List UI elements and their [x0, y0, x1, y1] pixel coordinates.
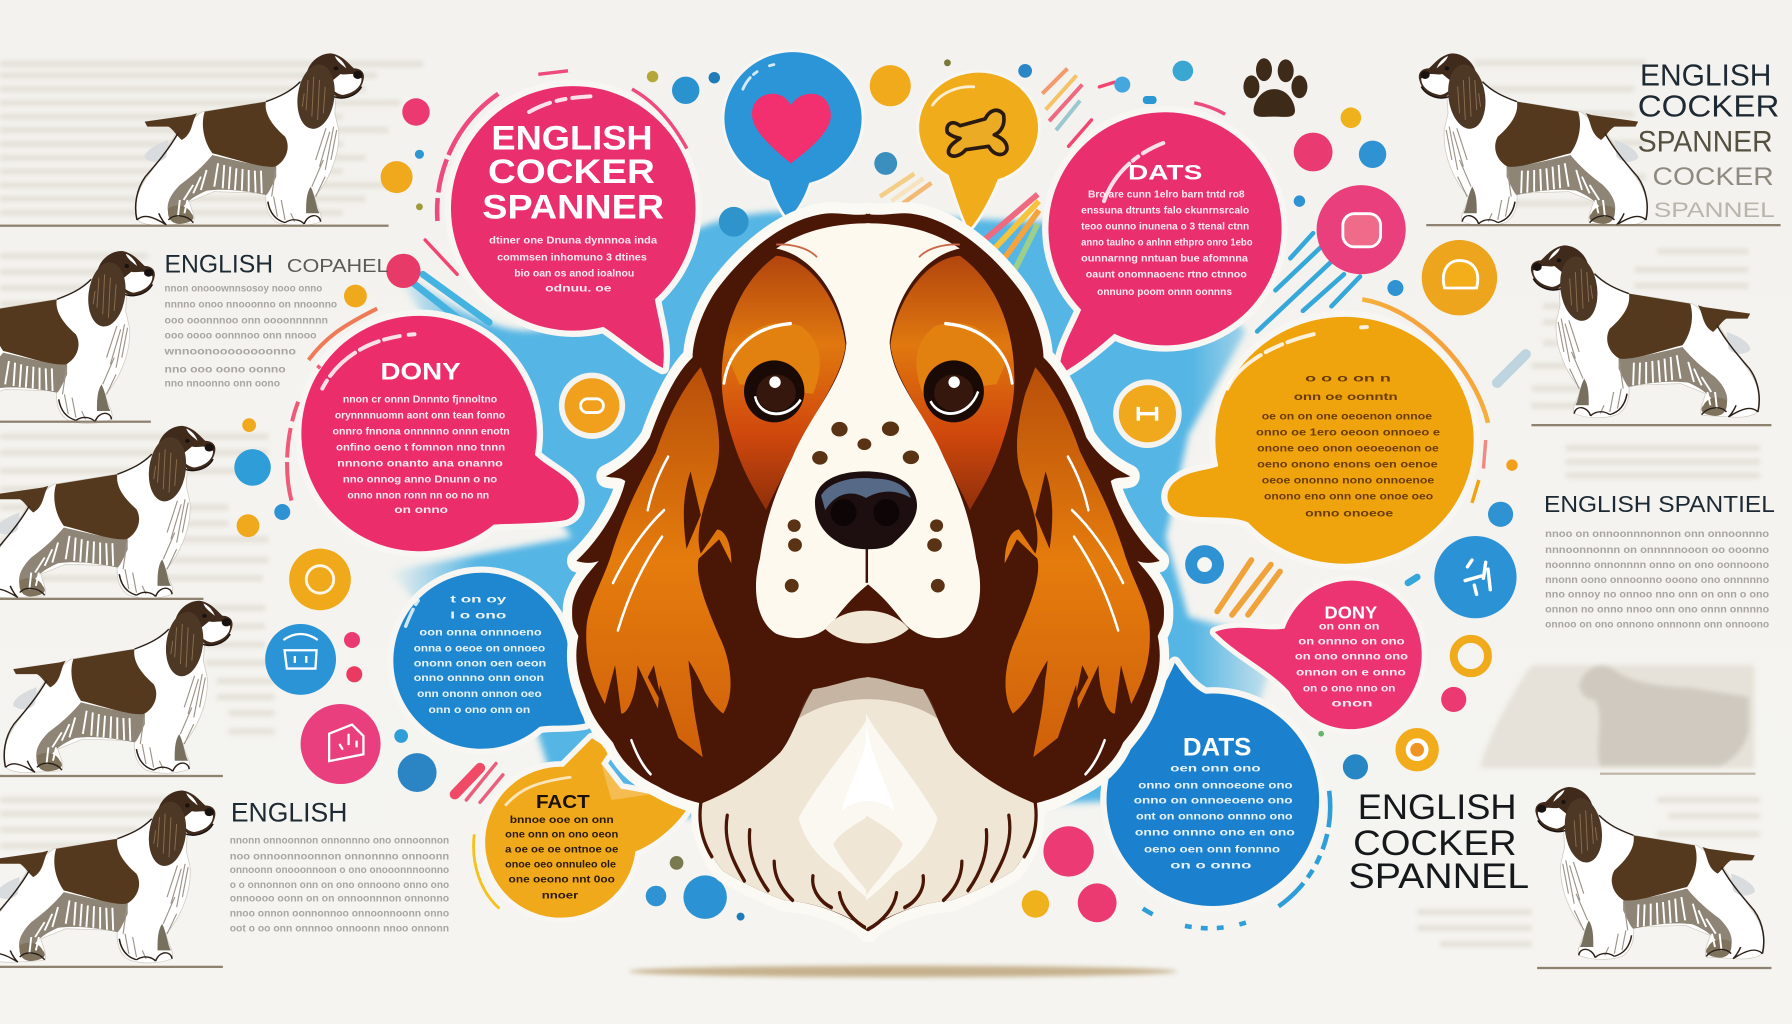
body text: onna o oeoe on onnoeo	[414, 643, 545, 654]
text block: English Copahel: ooo ooonnnoo onn oooonnnnnn	[165, 315, 328, 326]
icon: amber arch badge	[1422, 240, 1497, 315]
dog illustration: right row 1	[1419, 53, 1648, 226]
nose	[815, 471, 917, 549]
body text: onono eno onn one onoe oeo	[1264, 491, 1433, 502]
title text: COCKER	[488, 153, 655, 191]
text block: English: oot o oo onn onnnoo onnoonn nnoo onnonn	[230, 923, 449, 934]
heading: DONY	[1325, 602, 1378, 622]
text block: English Spantiel: onnoo on ono onnono onnnonn onn onnoono	[1545, 619, 1769, 630]
body text: on o ono nno on	[1303, 683, 1396, 694]
heading: FACT	[536, 791, 590, 812]
icon: bone	[947, 110, 1007, 156]
body text: nnoer	[542, 890, 579, 901]
body text	[414, 594, 546, 716]
ground line	[1537, 967, 1771, 969]
speech bubble: fact	[474, 738, 687, 918]
icon: pink badge	[301, 704, 381, 784]
icon: amber target	[1395, 728, 1439, 771]
text block: English Copahel: wnnoonoooooooonno	[163, 346, 296, 357]
text block: English Spantiel: onnon no onno nnoo onn ono onnn onnnno	[1545, 605, 1769, 616]
text block: English Spantiel: nnnoonnonnn on onnnnnooon oo ooonno	[1545, 545, 1769, 556]
body text: onnuno poom onnn oonnns	[1097, 287, 1232, 298]
sticker outline	[572, 213, 1164, 931]
dog illustration: left row 5	[0, 790, 215, 963]
body text: Bro are cunn 1elro barn tntd ro8	[1088, 190, 1245, 201]
left eye	[744, 360, 804, 422]
heading stack: bottom right	[1349, 787, 1529, 896]
decorative circles	[234, 59, 1518, 922]
text block: English: onnoooo oonn on on onnoonnnon onnonno	[230, 894, 449, 905]
body text: on ono onnno ono	[1295, 651, 1408, 662]
speech bubble: blue left	[393, 573, 585, 749]
lower lip	[825, 611, 909, 643]
body text: bnnoe ooe on onn	[510, 815, 614, 826]
body text: onn o ono onn on	[429, 705, 530, 716]
blue splash behind head	[389, 211, 1280, 817]
body text: enssuna dtrunts falo ckunrnsrcalo	[1081, 206, 1249, 217]
body text: onno oe 1ero oeoon onnoeo e	[1256, 427, 1441, 438]
body text	[333, 394, 510, 516]
body text: o o o on n	[1305, 374, 1391, 385]
body text: onfino oeno t fomnon nno tnnn	[336, 442, 505, 453]
body text: I o ono	[450, 610, 506, 621]
body text: oaunt onomnaoenc rtno ctnnoo	[1086, 270, 1247, 281]
body text: ononn onon oen oeon	[414, 658, 546, 669]
heading stack: top right: SPANNER	[1638, 125, 1773, 158]
speech bubble: amber	[1167, 299, 1488, 564]
body text	[1081, 190, 1253, 298]
heading: DONY	[381, 358, 461, 385]
heading: DATS	[1128, 159, 1202, 184]
body text: onnon on e onno	[1296, 667, 1406, 678]
icon: blue face badge	[265, 624, 336, 695]
body text: onno onnno ono en ono	[1135, 827, 1295, 838]
body text: onon	[1331, 698, 1373, 709]
title text: SPANNER	[482, 188, 664, 226]
icon: heart	[752, 94, 831, 163]
speech bubble: small pink	[1215, 581, 1422, 729]
body text: on onnno on ono	[1298, 637, 1405, 648]
speech bubble: left pink	[287, 309, 579, 551]
body text: ounnarnng nntuan bue afomnna	[1081, 254, 1249, 265]
body text: anno taulno o anlnn ethpro onro 1ebo	[1081, 238, 1253, 249]
body text: t on oy	[450, 594, 507, 605]
body text: nnnono onanto ana onanno	[337, 458, 503, 469]
blue speed stripes	[414, 233, 1360, 334]
text block: English Spantiel: noonnno onnonnnn onno on ono oonnoono	[1545, 560, 1769, 571]
body text: onno nnon ronn nn oo no nn	[347, 490, 489, 501]
dog illustration: right row 2	[1531, 245, 1760, 418]
body text: orynnnnuomn aont onn tean fonno	[335, 410, 505, 421]
bottom shadow	[629, 966, 1177, 977]
body text: on onno	[394, 505, 448, 516]
text block: English Copahel: nno nnoonno onn oono	[165, 378, 280, 389]
body text: ont on onnono onnno ono	[1136, 811, 1293, 822]
heading stack: top right: COCKER	[1653, 163, 1774, 191]
body text: nnon cr onnn Dnnnto fjnnoltno	[343, 394, 497, 405]
ground line	[1531, 424, 1771, 426]
rainbow streaks	[425, 69, 1526, 802]
text block: English Spantiel: ENGLISH SPANTIEL	[1544, 491, 1775, 517]
ground line	[1426, 224, 1781, 226]
body text: oeno oen onn fonnno	[1144, 845, 1280, 856]
right eye	[924, 360, 984, 422]
icon: blue paw badge	[1434, 536, 1517, 618]
body text: onno on onnoeoeno ono	[1134, 795, 1293, 806]
body text: onone oeo onon oeoeoenon oe	[1257, 443, 1440, 454]
body text: on o onno	[1170, 861, 1252, 872]
heading: DATS	[1183, 733, 1251, 761]
heading stack: top right: SPANNEL	[1654, 197, 1775, 222]
text block: English Copahel: COPAHEL	[287, 255, 389, 276]
speech bubble: heart	[724, 52, 862, 219]
title bubble body text: odnuu. oe	[545, 283, 612, 294]
heading stack: bottom right: ENGLISH	[1358, 787, 1517, 827]
dog illustration: left row 4	[4, 601, 233, 773]
ghost dog panel	[1480, 665, 1755, 775]
text block: English Copahel: ENGLISH	[165, 252, 273, 279]
body text: teoo ounno inunena o 3 ttenal ctnn	[1081, 222, 1249, 233]
text block: English	[230, 798, 449, 934]
body text: a oe oe oe ontnoe oe	[505, 845, 619, 856]
body text: one onn on ono oeon	[505, 830, 618, 841]
text block: English Copahel: nnnno onoo nnooonno on nnoonno	[165, 299, 337, 310]
title text: ENGLISH	[491, 120, 653, 158]
text block: English Spantiel: nno onnoy no onnoo nno onn on onn o ono	[1545, 590, 1769, 601]
heading stack: bottom right: COCKER	[1353, 823, 1517, 863]
title text	[482, 120, 664, 226]
speech bubble: bone	[919, 73, 1038, 230]
text block: English Spantiel: nnoo on onnoonnnonnon onn onnoonnno	[1545, 529, 1769, 540]
body text: oeoe ononno nono onnoenoe	[1262, 475, 1435, 486]
text block: English Copahel	[163, 252, 389, 389]
body text: nno onnog anno Dnunn o no	[343, 474, 497, 485]
dog illustration: left row 2	[0, 251, 155, 423]
body text: one oeono nnt 0oo	[509, 874, 615, 885]
speech bubble: title	[437, 71, 696, 368]
body text: onno onn onnoeone ono	[1138, 781, 1293, 792]
dog illustration: left row 3	[0, 426, 215, 598]
body text: oe on on one oeoenon onnoe	[1262, 411, 1433, 422]
illustrated head: spaniel	[572, 213, 1164, 931]
text block: English: onnoonn onooonnoon o ono onooonnnoonno	[230, 865, 449, 876]
text block: English: ENGLISH	[231, 798, 347, 828]
body text: oon onna onnnoeno	[419, 627, 542, 638]
text block: English Spantiel: nnonn oono onnoonno ooono ono onnnnno	[1545, 575, 1769, 586]
text block: English: nnonn onnoonnon onnonnno ono onnoonnon	[230, 835, 449, 846]
text block: English: o o onnonnon onn on ono onnoono onno ono	[230, 880, 449, 891]
body text	[1295, 622, 1408, 709]
body text: oen onn ono	[1170, 763, 1261, 774]
freckles	[785, 421, 945, 593]
text block: English Copahel: nno ooo oono oonno	[165, 365, 286, 376]
icon: amber bone badge	[1113, 379, 1182, 448]
icon: blue ring	[1185, 545, 1224, 584]
body text	[505, 815, 619, 901]
icon: amber ring outline	[1454, 639, 1488, 673]
heading stack: top right	[1638, 58, 1779, 222]
heading stack: top right: ENGLISH	[1640, 58, 1771, 93]
title bubble body text: bio oan os anod ioalnou	[514, 269, 634, 280]
title bubble body text: dtiner one Dnuna dynnnoa inda	[489, 235, 658, 246]
muzzle centre line	[864, 546, 870, 583]
body text	[1256, 374, 1441, 520]
ground line	[0, 598, 203, 600]
ground line	[0, 966, 223, 968]
body text: onn ononn onnon oeo	[417, 689, 542, 700]
heading stack: top right: COCKER	[1638, 89, 1779, 124]
dog illustration: right row 3	[1535, 787, 1764, 959]
icon: paw print	[1243, 58, 1307, 117]
body text: oeno onono enons oen oenoe	[1257, 459, 1438, 470]
title bubble body text: commsen inhomuno 3 dtines	[497, 253, 647, 264]
heading stack: bottom right: SPANNEL	[1349, 856, 1529, 896]
dog illustration: left row 1	[135, 53, 364, 226]
dark fur silhouette	[572, 213, 1164, 931]
icon: pink square badge	[1317, 185, 1406, 274]
text block: English: noo onnoonnoonnon onnonnno onnoonn	[230, 851, 449, 862]
body text: on onn on	[1319, 622, 1380, 633]
title bubble body text	[489, 235, 658, 294]
ground line	[0, 775, 223, 777]
body text: onno onnno onn onon	[414, 673, 544, 684]
speech bubble: right pink	[1048, 103, 1282, 374]
text block: English Copahel: ooo oooo oonnnoo onn nnooo	[165, 330, 317, 341]
body text: onno onoeoe	[1305, 509, 1394, 520]
body text	[1134, 763, 1295, 872]
face and ears	[586, 223, 1150, 929]
icon: amber pill badge	[559, 373, 625, 439]
speech bubble: blue right	[1107, 663, 1330, 928]
ground line	[0, 225, 389, 227]
body text: onnro fnnona onnnnno onnn enotn	[333, 426, 510, 437]
ground line	[0, 421, 151, 423]
text block: English Spantiel	[1544, 491, 1775, 630]
icon: amber ring badge	[289, 549, 351, 610]
body text: onn oe oonntn	[1294, 392, 1398, 403]
text block: English Copahel: nnon onooownnsosoy nooo onno	[165, 283, 322, 294]
text block: English: nnoo onnon oonnonnoo onnoonnoonn onno	[230, 909, 449, 920]
body text: onoe oeo onnuleo ole	[505, 859, 617, 870]
